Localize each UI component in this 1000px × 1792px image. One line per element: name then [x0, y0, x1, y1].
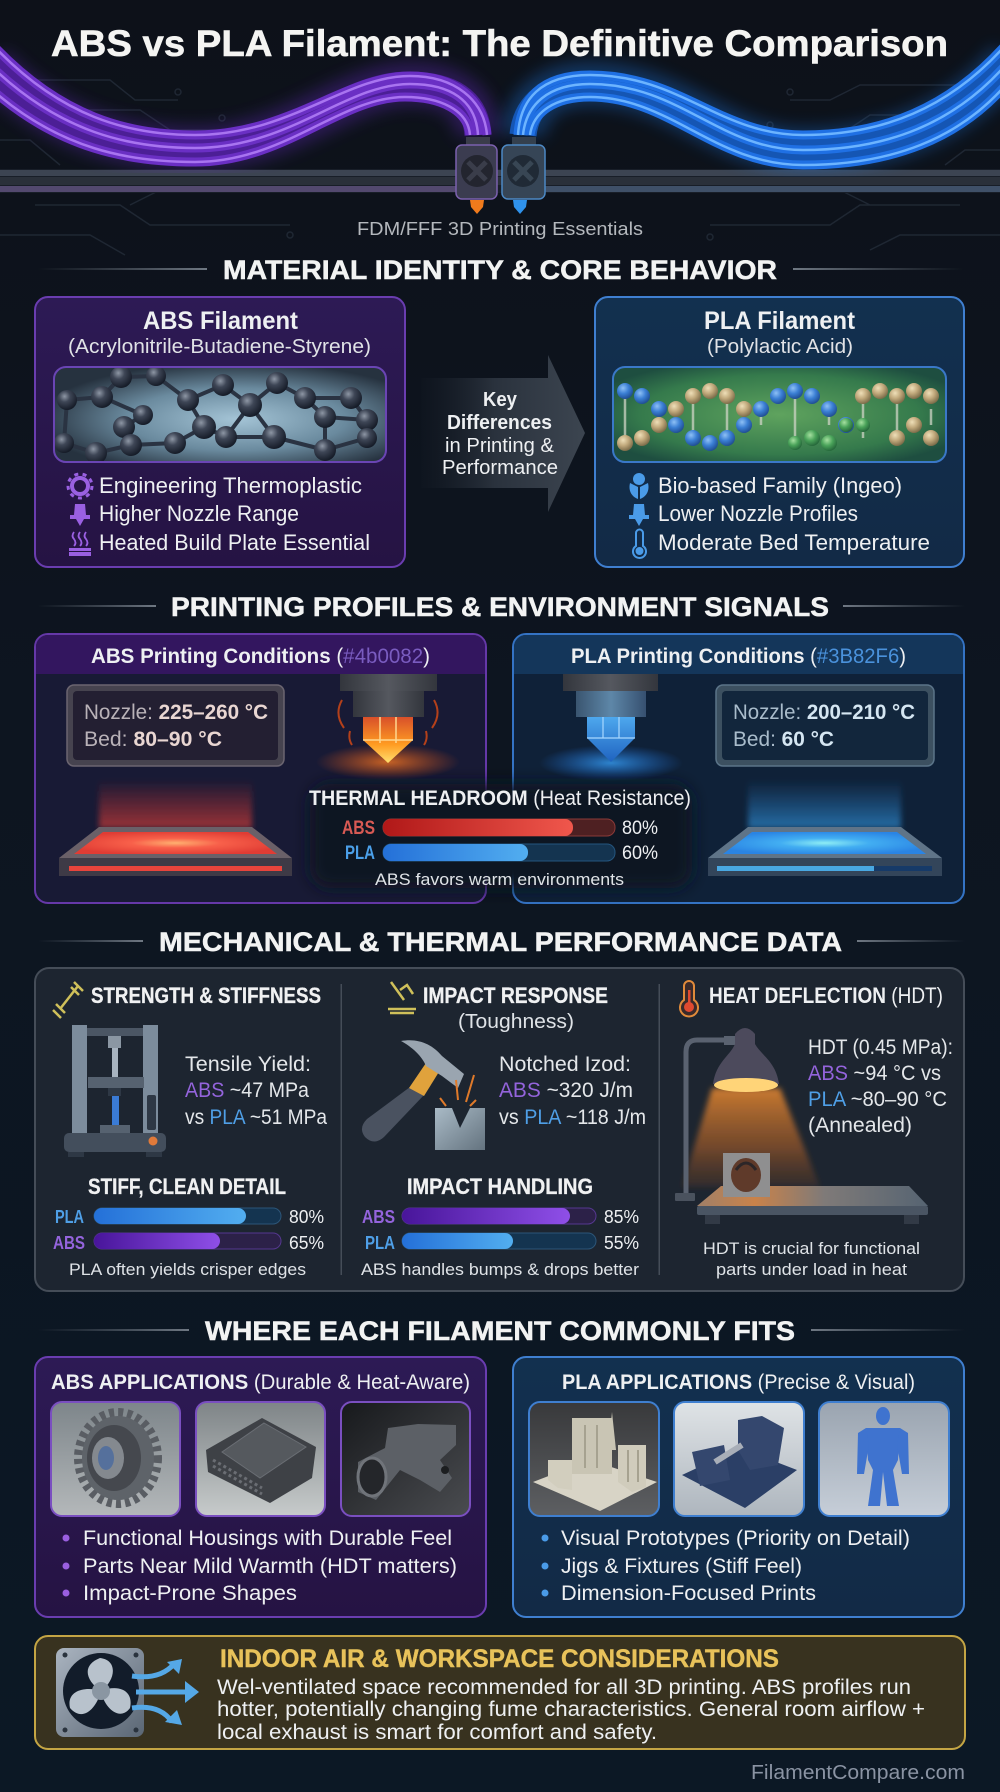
stat: tensile yield [185, 1053, 327, 1129]
list: PLA uses: Jigs & Fixtures (Stiff Feel) [561, 1555, 802, 1578]
blue filament strands [518, 40, 1000, 165]
stat: notched izod: vs PLA ~118 J/m [499, 1106, 646, 1129]
list: PLA uses [542, 1527, 910, 1605]
bar: PLA 55%: PLA [365, 1233, 395, 1253]
text: key differences: in Printing & [445, 435, 555, 457]
text: bio-based family: Bio-based Family (Ingeo) [658, 473, 902, 498]
icon: tensile specimen [53, 982, 83, 1018]
heated bed: PLA [708, 780, 942, 876]
bar: PLA 55% [365, 1233, 639, 1253]
header art: filaments and print heads [0, 40, 1000, 214]
image: jig fixture [674, 1402, 804, 1516]
image: blue figure [819, 1402, 949, 1516]
panel: PLA applications [513, 1357, 964, 1617]
image: architectural model [529, 1402, 659, 1516]
note: ABS favors warm environments: ABS favors warm environments [375, 870, 624, 889]
heading: impact response: IMPACT RESPONSE [423, 983, 608, 1008]
bar: PLA 60%: 60% [622, 843, 658, 864]
list: PLA uses: Visual Prototypes (Priority on Detail) [561, 1527, 910, 1550]
icon: impact [388, 982, 416, 1013]
image: gear [51, 1402, 180, 1516]
list: PLA uses: Dimension-Focused Prints [561, 1582, 816, 1605]
bar: PLA 60% [345, 843, 658, 864]
heading: ABS printing conditions: ABS Printing Conditions (#4b0082) [91, 645, 430, 668]
image: housing [196, 1402, 325, 1516]
bar: PLA 55%: 55% [604, 1233, 639, 1253]
note: HDT importance: HDT is crucial for functional [703, 1239, 920, 1258]
list: ABS uses: Impact-Prone Shapes [83, 1582, 297, 1605]
bar: PLA 80% [55, 1207, 324, 1227]
title: ABS vs PLA Filament: The Definitive Comparison [51, 23, 948, 64]
bar: ABS 85%: ABS [362, 1207, 395, 1227]
heading: ABS filament: ABS Filament [143, 307, 299, 335]
readout: PLA temperatures: Bed: 60 °C [733, 728, 834, 751]
circuit background traces [0, 80, 1000, 255]
stat: tensile yield: vs PLA ~51 MPa [185, 1106, 327, 1129]
icon: gear [68, 474, 92, 498]
subheading: ABS full name: (Acrylonitrile-Butadiene-Styrene) [68, 336, 371, 358]
column: heat deflection [675, 981, 953, 1279]
purple filament strands [0, 42, 487, 162]
icon: thermometer [633, 530, 646, 558]
panel: ABS applications [35, 1357, 486, 1617]
section heading: mechanical performance: MECHANICAL & THERMAL PERFORMANCE DATA [159, 927, 842, 957]
readout: PLA temperatures [716, 685, 934, 766]
icon: bio-based [629, 473, 649, 499]
text: key differences: Key [483, 389, 518, 411]
illustration: tensile test machine [64, 1025, 166, 1157]
heading: ABS applications: ABS APPLICATIONS (Durable & Heat-Aware) [51, 1371, 470, 1394]
note: HDT importance: parts under load in heat [716, 1260, 907, 1279]
text: key differences: Performance [442, 457, 558, 479]
text: key differences: Differences [447, 412, 552, 434]
panel: indoor air considerations [35, 1636, 965, 1749]
note: crisper edges: PLA often yields crisper edges [69, 1260, 306, 1279]
readout: ABS temperatures: Bed: 80–90 °C [84, 728, 222, 751]
footer: site name: FilamentCompare.com [751, 1762, 965, 1784]
subheading: PLA full name: (Polylactic Acid) [707, 336, 853, 358]
bar: ABS 80% [342, 818, 658, 839]
bar: ABS 65% [53, 1233, 324, 1253]
heading: PLA filament: PLA Filament [704, 307, 856, 335]
bar: ABS 85%: 85% [604, 1207, 639, 1227]
panel: ABS printing conditions [35, 634, 486, 903]
heading: strength and stiffness: STRENGTH & STIFFNESS [91, 983, 321, 1008]
text: ventilation advice: hotter, potentially changing fume characteristics. General room airflow + [217, 1698, 925, 1721]
ABS print head [456, 137, 497, 214]
heading: heat deflection: HEAT DEFLECTION (HDT) [709, 983, 943, 1008]
list: ABS uses: Functional Housings with Durable Feel [83, 1527, 452, 1550]
bar: PLA 80%: PLA [55, 1207, 84, 1227]
subtitle: FDM/FFF 3D Printing Essentials [357, 219, 643, 239]
panel: ABS filament identity [35, 297, 405, 567]
illustration: hammer and notched specimen [362, 1040, 485, 1150]
icon: nozzle [70, 504, 90, 526]
image: bracket part [341, 1402, 470, 1516]
subheading: stiff clean detail: STIFF, CLEAN DETAIL [88, 1174, 286, 1199]
bar: ABS 80%: 80% [622, 818, 658, 839]
image: PLA DNA helix [613, 367, 946, 462]
panel: PLA filament identity [595, 297, 964, 567]
arrow: key differences [421, 355, 585, 512]
heated bed: ABS [59, 780, 292, 876]
panel: performance data [35, 968, 964, 1291]
heading: PLA printing conditions: PLA Printing Conditions (#3B82F6) [571, 645, 906, 668]
heading: PLA applications: PLA APPLICATIONS (Precise & Visual) [562, 1371, 915, 1394]
note: bumps and drops: ABS handles bumps & drops better [361, 1260, 639, 1279]
readout: PLA temperatures: Nozzle: 200–210 °C [733, 701, 915, 724]
text: higher nozzle range: Higher Nozzle Range [99, 501, 299, 526]
text: ventilation advice: local exhaust is smart for comfort and safety. [217, 1721, 657, 1744]
text: ventilation advice: Wel-ventilated space recommended for all 3D printing. ABS profiles run [217, 1676, 911, 1699]
stat: HDT values [808, 1036, 953, 1137]
PLA print head [502, 137, 545, 214]
stat: HDT values: (Annealed) [808, 1114, 912, 1137]
text: ventilation advice [217, 1676, 925, 1744]
icon: heated plate [69, 532, 91, 556]
bar: PLA 60%: PLA [345, 843, 375, 864]
stat: tensile yield: Tensile Yield: [185, 1053, 311, 1076]
heading: indoor air: INDOOR AIR & WORKSPACE CONSIDERATIONS [220, 1645, 779, 1673]
text: lower nozzle profiles: Lower Nozzle Profiles [658, 501, 858, 526]
text: key differences [442, 389, 558, 479]
image: ABS molecular structure [54, 366, 386, 464]
list: ABS uses [62, 1527, 457, 1605]
section heading: material identity: MATERIAL IDENTITY & CORE BEHAVIOR [223, 255, 777, 285]
readout: ABS temperatures [67, 685, 284, 766]
bar: ABS 65%: 65% [289, 1233, 324, 1253]
icon: nozzle [629, 504, 649, 526]
heading: thermal headroom: THERMAL HEADROOM (Heat Resistance) [309, 787, 691, 810]
subheading: toughness: (Toughness) [458, 1011, 574, 1033]
text: engineering thermoplastic: Engineering Thermoplastic [99, 473, 362, 498]
section heading: printing profiles: PRINTING PROFILES & ENVIRONMENT SIGNALS [171, 592, 829, 622]
bar: ABS 65%: ABS [53, 1233, 85, 1253]
rail [0, 169, 1000, 193]
nozzle: hot ABS [316, 674, 460, 780]
illustration: lamp over specimen [675, 1028, 928, 1224]
column: strength and stiffness [53, 982, 327, 1279]
bar: PLA 80%: 80% [289, 1207, 324, 1227]
section heading: where each filament fits: WHERE EACH FILAMENT COMMONLY FITS [205, 1316, 795, 1346]
chart: thermal headroom [309, 784, 692, 889]
note: HDT importance [703, 1239, 920, 1279]
stat: notched izod: ABS ~320 J/m [499, 1079, 633, 1102]
icon: thermometer [680, 981, 698, 1016]
stat: notched izod [499, 1053, 646, 1129]
readout: ABS temperatures: Nozzle: 225–260 °C [84, 701, 268, 724]
subheading: impact handling: IMPACT HANDLING [407, 1174, 593, 1199]
nozzle: cool PLA [539, 674, 683, 781]
stat: notched izod: Notched Izod: [499, 1053, 631, 1076]
stat: HDT values: HDT (0.45 MPa): [808, 1036, 953, 1059]
list: ABS uses: Parts Near Mild Warmth (HDT matters) [83, 1555, 457, 1578]
bar: ABS 80%: ABS [342, 818, 375, 839]
icon: fan with airflow arrows [56, 1648, 199, 1737]
bar: ABS 85% [362, 1207, 639, 1227]
stat: HDT values: PLA ~80–90 °C [808, 1088, 947, 1111]
stat: tensile yield: ABS ~47 MPa [185, 1079, 309, 1102]
stat: HDT values: ABS ~94 °C vs [808, 1062, 941, 1085]
column: impact response [361, 982, 646, 1279]
text: moderate bed temperature: Moderate Bed Temperature [658, 530, 930, 555]
panel: PLA printing conditions [513, 634, 964, 903]
text: heated build plate: Heated Build Plate Essential [99, 530, 370, 555]
